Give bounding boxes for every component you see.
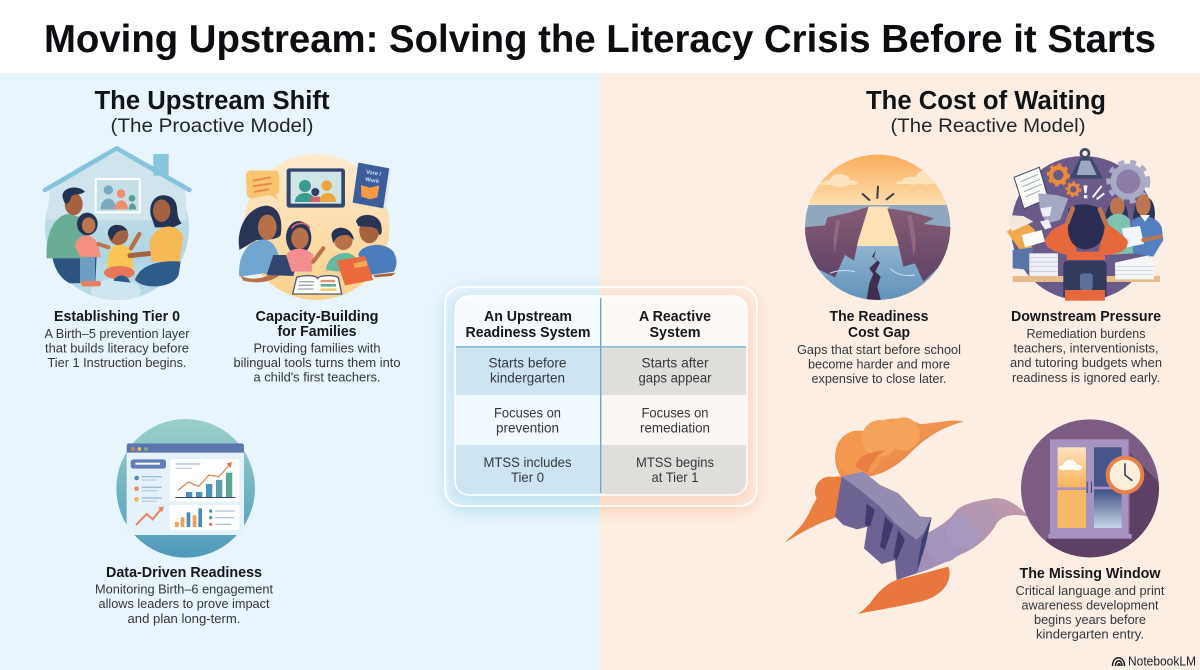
text: establishing tier 0: Tier 1 Instruction begins. xyxy=(48,355,186,370)
text: the readiness cost gap: Cost Gap xyxy=(848,325,910,341)
table outer frame xyxy=(445,287,757,506)
window scene xyxy=(1021,419,1163,560)
text: downstream pressure: readiness is ignored early. xyxy=(1012,370,1160,385)
row 1 right: Starts after xyxy=(642,354,709,370)
text: establishing tier 0: A Birth–5 prevention layer xyxy=(44,326,190,341)
text: establishing tier 0: Establishing Tier 0 xyxy=(54,309,180,325)
icon: crumbling cliff with smoke and missing window xyxy=(785,417,1163,614)
row 2 left xyxy=(494,404,561,436)
row 3 right xyxy=(636,454,714,485)
title: Moving Upstream: Solving the Literacy Crisis Before it Starts xyxy=(44,18,1156,61)
row 2 left: prevention xyxy=(496,420,559,436)
text: capacity-building for families: a child's first teachers. xyxy=(254,370,380,384)
left column header xyxy=(466,308,590,341)
heading: the upstream shift: (The Proactive Model) xyxy=(110,115,314,137)
text: data-driven readiness: Data-Driven Readiness xyxy=(106,565,262,581)
orange cloud left xyxy=(785,476,845,543)
row 3 left: MTSS includes xyxy=(484,454,572,470)
text: the missing window: kindergarten entry. xyxy=(1036,626,1144,642)
right column header: System xyxy=(650,324,700,341)
text: the readiness cost gap: Gaps that start before school xyxy=(797,342,961,357)
crumbling rock xyxy=(835,472,932,580)
row 1 left xyxy=(488,354,567,386)
left column cells xyxy=(455,296,600,495)
text: the missing window xyxy=(1016,566,1165,642)
text: downstream pressure: teachers, interventionists, xyxy=(1014,340,1158,356)
glow left of table xyxy=(438,283,600,519)
text: the missing window: Critical language and print xyxy=(1016,583,1165,598)
text: data-driven readiness xyxy=(95,565,273,626)
text: downstream pressure: Downstream Pressure xyxy=(1011,309,1161,325)
orange cloud upper xyxy=(835,417,964,478)
text: capacity-building for families: bilingual tools turns them into xyxy=(234,355,400,370)
text: data-driven readiness: allows leaders to prove impact xyxy=(98,596,270,611)
heading: the cost of waiting: The Cost of Waiting xyxy=(866,87,1106,115)
left column header: An Upstream xyxy=(484,308,572,325)
title band xyxy=(0,0,1200,73)
text: capacity-building for families xyxy=(234,309,400,384)
text: downstream pressure: Remediation burdens xyxy=(1026,326,1146,341)
row 2 left: Focuses on xyxy=(494,404,561,420)
glow right of table xyxy=(600,284,764,518)
text: the readiness cost gap: The Readiness xyxy=(830,309,928,325)
right column cells xyxy=(600,296,747,495)
row 2 right: Focuses on xyxy=(642,404,708,420)
text: downstream pressure: and tutoring budgets when xyxy=(1010,355,1162,370)
text: the readiness cost gap xyxy=(797,309,961,386)
text: capacity-building for families: Providing families with xyxy=(254,340,380,356)
text: the readiness cost gap: expensive to close later. xyxy=(812,371,946,386)
row 1 right xyxy=(638,354,712,386)
orange cloud lower xyxy=(857,567,950,614)
row 3 right: at Tier 1 xyxy=(652,469,699,485)
right column header: A Reactive xyxy=(639,308,711,325)
text: establishing tier 0: that builds literacy before xyxy=(45,340,189,356)
row 1 left: kindergarten xyxy=(490,370,565,386)
icon: family with bilingual tools: Vore / xyxy=(365,170,382,178)
row 3 left: Tier 0 xyxy=(511,469,544,485)
icon: family with bilingual tools xyxy=(239,154,397,300)
icon: cliff with readiness gap xyxy=(803,153,953,303)
row 1 left: Starts before xyxy=(488,354,567,370)
row 2 right xyxy=(640,404,710,436)
text: capacity-building for families: Capacity-Building xyxy=(256,309,378,325)
row 1 right: gaps appear xyxy=(638,370,712,386)
right column header xyxy=(639,308,711,341)
icon: family with bilingual tools: Work xyxy=(365,177,380,185)
text: capacity-building for families: for Families xyxy=(278,324,356,340)
left column header: Readiness System xyxy=(466,324,590,341)
heading: the cost of waiting: (The Reactive Model) xyxy=(890,115,1086,137)
text: the missing window: The Missing Window xyxy=(1020,566,1161,582)
heading: the cost of waiting xyxy=(866,87,1106,137)
row 3 right: MTSS begins xyxy=(636,454,714,470)
icon: analytics dashboard xyxy=(116,419,255,558)
text: data-driven readiness: Monitoring Birth–6 engagement xyxy=(95,582,273,596)
left panel background xyxy=(0,73,600,670)
notebooklm logo: NotebookLM xyxy=(1128,654,1196,668)
text: the missing window: awareness development xyxy=(1022,598,1159,612)
icon: overwhelmed educators xyxy=(1007,149,1163,301)
comparison table xyxy=(445,287,757,506)
text: the readiness cost gap: become harder and more xyxy=(808,356,950,372)
row 3 left xyxy=(484,454,572,485)
heading: the upstream shift xyxy=(94,87,330,137)
row 2 right: remediation xyxy=(640,420,710,436)
heading: the upstream shift: The Upstream Shift xyxy=(94,87,330,115)
text: data-driven readiness: and plan long-term. xyxy=(128,611,240,626)
icon: notebooklm arcs xyxy=(1112,658,1124,666)
icon: family in house xyxy=(45,148,192,305)
text: downstream pressure xyxy=(1010,309,1162,385)
right panel background xyxy=(600,73,1200,670)
smoke trail xyxy=(917,498,1028,573)
text: the missing window: begins years before xyxy=(1034,612,1146,627)
text: establishing tier 0 xyxy=(44,309,190,370)
